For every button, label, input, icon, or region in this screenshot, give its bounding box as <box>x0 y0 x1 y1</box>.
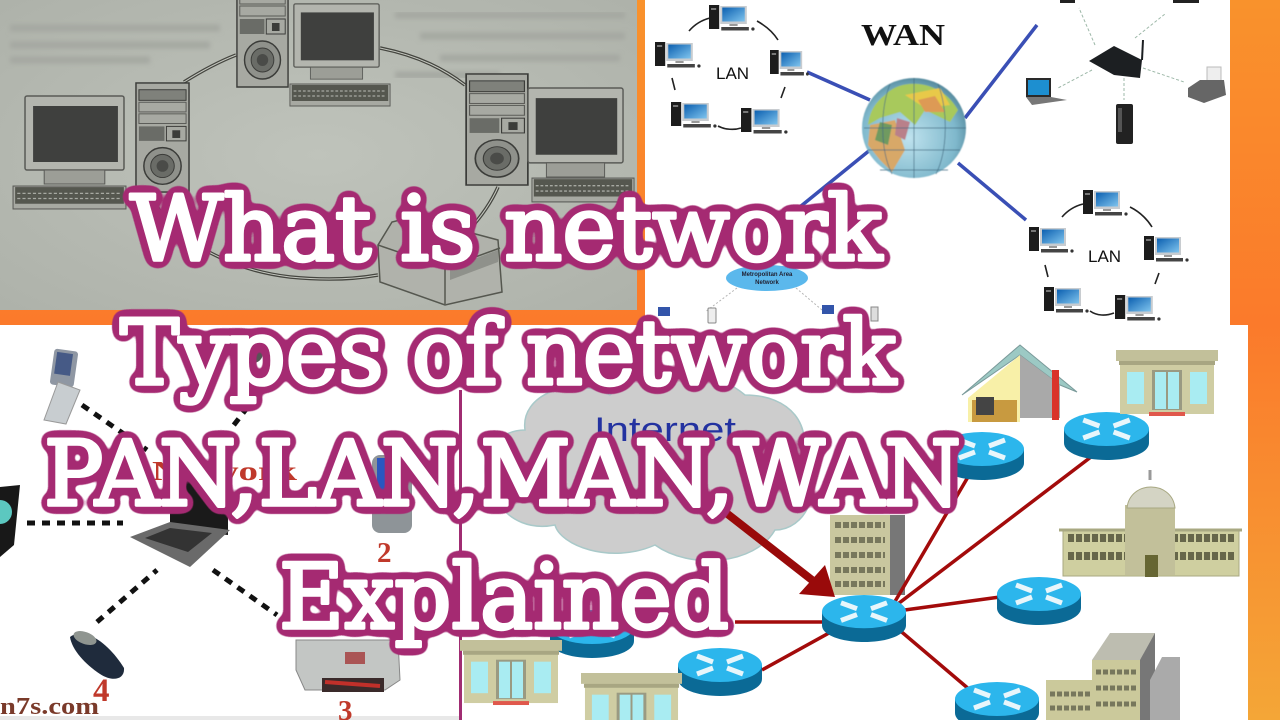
cloud <box>485 372 811 561</box>
LAN ring left: LAN <box>716 64 749 83</box>
WAN heading: WAN <box>861 17 945 52</box>
number labels: 2 <box>377 537 392 569</box>
stores <box>460 350 1218 720</box>
title <box>44 177 961 650</box>
house <box>962 345 1077 422</box>
divider <box>459 390 462 720</box>
PAN diagram <box>0 343 412 720</box>
webcam <box>243 343 263 363</box>
ring cable <box>155 48 498 279</box>
MAN bubble <box>658 265 878 323</box>
source credit: n7s.com <box>0 694 99 720</box>
office buildings <box>1046 633 1180 720</box>
blue links <box>790 25 1037 220</box>
LAN ring left <box>655 5 809 134</box>
computer top <box>237 0 390 106</box>
PAN caption: PAN Network <box>65 456 297 486</box>
server tower <box>1116 104 1133 144</box>
laptop <box>1026 78 1067 105</box>
flip phone <box>44 349 80 424</box>
number labels: 4 <box>93 673 110 709</box>
panel: bottom white network area <box>0 325 1248 720</box>
title line 3: PAN,LAN,MAN,WAN <box>44 422 961 527</box>
red links <box>735 444 1108 690</box>
center laptop <box>130 470 230 567</box>
title line 2: Types of network <box>120 301 897 406</box>
Internet label: Internet <box>594 411 737 449</box>
capitol <box>1059 470 1242 577</box>
panel: photo of ring network <box>0 0 637 310</box>
panel: WAN diagram <box>645 0 1230 326</box>
computer right <box>466 74 634 202</box>
tower building <box>830 515 905 595</box>
title line 1: What is network <box>130 177 883 282</box>
internet network diagram <box>460 345 1242 720</box>
number labels <box>93 537 392 720</box>
printer <box>378 217 502 305</box>
globe <box>862 78 966 178</box>
computer left <box>13 83 189 209</box>
printer <box>1188 67 1226 103</box>
printer <box>296 640 400 692</box>
mouse <box>70 628 124 679</box>
title line 4: Explained <box>279 545 729 650</box>
thick arrow <box>725 512 835 597</box>
routers <box>550 412 1149 720</box>
left laptop <box>0 485 20 557</box>
PAN dashed links <box>27 395 277 622</box>
MAN bubble: Network <box>755 280 779 286</box>
LAN ring right <box>1029 190 1189 321</box>
LAN ring right: LAN <box>1088 247 1121 266</box>
MAN bubble: Metropolitan Area <box>742 272 793 278</box>
phone 2 <box>372 455 412 533</box>
wifi router and devices <box>1026 0 1226 144</box>
